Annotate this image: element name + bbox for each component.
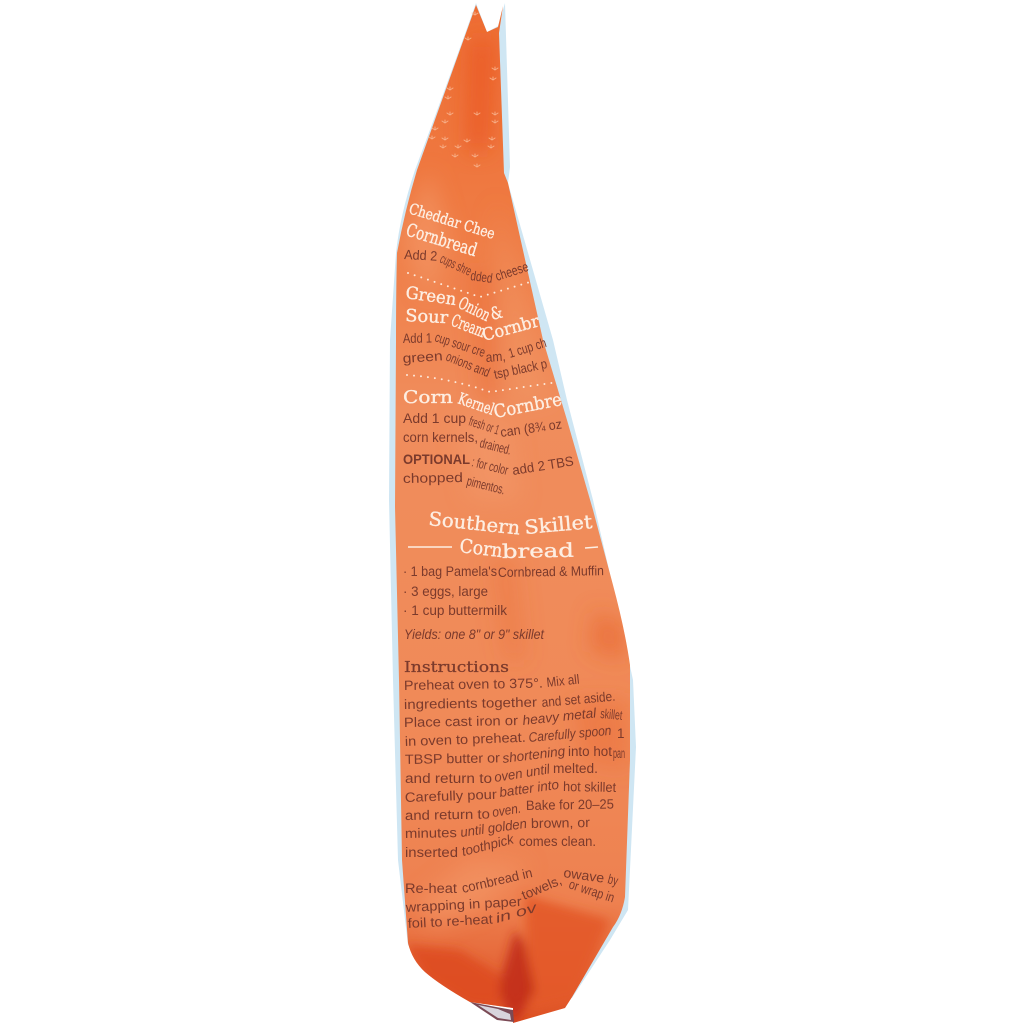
reheat paragraph: owave: [563, 865, 605, 886]
heading: corn kernel cornbread: Cornbre: [492, 389, 564, 423]
heading: green onion: &: [488, 303, 505, 325]
instructions paragraph: in oven to preheat.: [405, 730, 526, 749]
corn kernel instructions: can (8¾ oz: [499, 416, 563, 440]
heading: southern skillet cornbread: Southern: [427, 508, 521, 540]
instructions paragraph: Carefully pour: [405, 787, 498, 805]
instructions paragraph: minutes: [405, 825, 457, 841]
reheat paragraph: in ov: [494, 899, 540, 926]
green onion instructions: 1 cup ch: [506, 335, 548, 361]
instructions paragraph: TBSP butter or: [405, 750, 501, 767]
instructions paragraph: pan: [613, 746, 625, 761]
green onion instructions: Add 1: [403, 330, 432, 346]
recipe: cheddar cheese cornbread: [404, 200, 530, 286]
instructions paragraph: skillet: [600, 706, 623, 723]
optional note: add 2 TBS: [511, 453, 575, 478]
green onion instructions: am,: [485, 349, 506, 365]
heading: southern skillet cornbread: bread: [502, 540, 574, 563]
heading: green onion: Green: [404, 283, 458, 310]
heading: cheddar cheese: Cheddar Chee: [407, 200, 497, 243]
optional note: [403, 452, 575, 497]
instructions paragraph: Preheat oven to 375°.: [404, 676, 543, 693]
dotted divider 1: [408, 273, 530, 297]
instructions paragraph: and set aside.: [541, 689, 616, 710]
bottom fold shading: [405, 895, 610, 1024]
optional note: : for color: [470, 454, 510, 478]
ingredients list: · 1 bag Pamela's: [403, 564, 497, 579]
green onion instructions: onions and: [444, 349, 492, 380]
corn kernel instructions: [403, 411, 563, 458]
green onion instructions: cup sour cre: [433, 330, 487, 360]
bottom rolled edge: [470, 1002, 514, 1022]
heading: southern skillet cornbread: Corn: [458, 535, 504, 562]
heading: sour cream cornbread: Cream: [448, 311, 488, 342]
heading: southern skillet cornbread: Skillet: [524, 511, 594, 539]
cheddar instructions: [404, 247, 530, 286]
reheat paragraph: foil to re-heat: [407, 912, 493, 931]
instructions paragraph: Mix all: [546, 672, 580, 690]
ingredients list: · 1 cup buttermilk: [403, 603, 507, 618]
recipe: green onion and sour cream cornbread: [402, 283, 548, 382]
cheddar instructions: Add 2: [404, 247, 438, 264]
heading: sour cream cornbread: [405, 306, 542, 346]
bag back panel: [389, 3, 636, 1002]
instructions paragraph: 1: [617, 726, 625, 741]
instructions paragraph: Bake for 20–25: [526, 796, 614, 813]
instructions paragraph: melted.: [553, 761, 598, 776]
reheat paragraph: cornbread in: [460, 865, 534, 896]
crease shading: [400, 40, 628, 930]
optional note: OPTIONAL: [403, 452, 470, 467]
green onion instructions: [402, 330, 548, 382]
corn kernel instructions: fresh or 1: [467, 414, 501, 437]
instructions paragraph: oven until: [493, 761, 552, 785]
green onion instructions: tsp black p: [493, 356, 548, 382]
heading: corn kernel cornbread: [403, 387, 564, 423]
instructions paragraph: batter into: [498, 777, 560, 800]
reheat paragraph: by: [606, 871, 620, 889]
reheat paragraph: Re-heat: [405, 881, 457, 896]
heading: instructions: Instructions: [404, 658, 509, 676]
cheddar instructions: cheese: [493, 259, 530, 284]
instructions paragraph: into hot: [568, 744, 612, 759]
instructions paragraph: shortening: [502, 743, 566, 766]
ingredients list: · 3 eggs, large: [403, 584, 488, 599]
instructions paragraph: and return to: [405, 807, 490, 823]
instructions paragraph: heavy metal: [522, 705, 598, 728]
reheat paragraph: wrapping in paper: [404, 894, 523, 915]
instructions paragraph: Place cast iron or: [404, 713, 519, 730]
corn kernel instructions: corn kernels,: [403, 430, 478, 445]
heading: green onion: Onion: [455, 294, 493, 326]
instructions paragraph: and return to: [405, 771, 492, 786]
instructions paragraph: ingredients together: [404, 695, 538, 712]
decorative sparkle pattern: [429, 12, 498, 167]
optional note: chopped: [403, 470, 463, 486]
ingredients list: Cornbread & Muffin: [498, 563, 604, 580]
bag front panel: [395, 5, 630, 1023]
heading: green onion: [404, 283, 505, 326]
instructions paragraph: comes clean.: [519, 834, 596, 849]
instructions paragraph: oven.: [491, 801, 522, 820]
dotted divider 2: [407, 375, 558, 392]
heading: corn kernel cornbread: Corn: [403, 387, 453, 408]
recipe: corn kernel cornbread: [403, 387, 575, 497]
ingredients list: [403, 563, 604, 618]
reheat paragraph: towels,: [519, 873, 564, 903]
instructions paragraph: hot skillet: [563, 779, 616, 795]
instructions paragraph: until golden: [459, 816, 528, 840]
instructions paragraph: Carefully spoon: [528, 723, 612, 745]
green onion instructions: green: [402, 348, 443, 366]
heading: cornbread: Cornbread: [404, 220, 479, 261]
heading: sour cream cornbread: Sour: [405, 306, 450, 328]
cheddar instructions: dded: [470, 268, 493, 286]
corn kernel instructions: drained.: [478, 435, 513, 458]
heading: sour cream cornbread: Cornbr: [480, 311, 542, 346]
instructions paragraph: brown, or: [531, 815, 591, 831]
instructions paragraph: [404, 672, 625, 860]
reheat paragraph: or wrap in: [567, 877, 616, 905]
yield note: Yields: one 8" or 9" skillet: [404, 627, 545, 642]
reheat paragraph: [404, 865, 620, 931]
cheddar instructions: cups shre: [438, 251, 474, 279]
optional note: pimentos.: [465, 473, 507, 497]
heading: corn kernel cornbread: Kernel: [456, 389, 497, 419]
heading: southern skillet cornbread: [408, 508, 598, 563]
corn kernel instructions: Add 1 cup: [403, 411, 466, 426]
instructions paragraph: inserted: [405, 845, 458, 860]
instructions paragraph: toothpick: [460, 831, 516, 859]
